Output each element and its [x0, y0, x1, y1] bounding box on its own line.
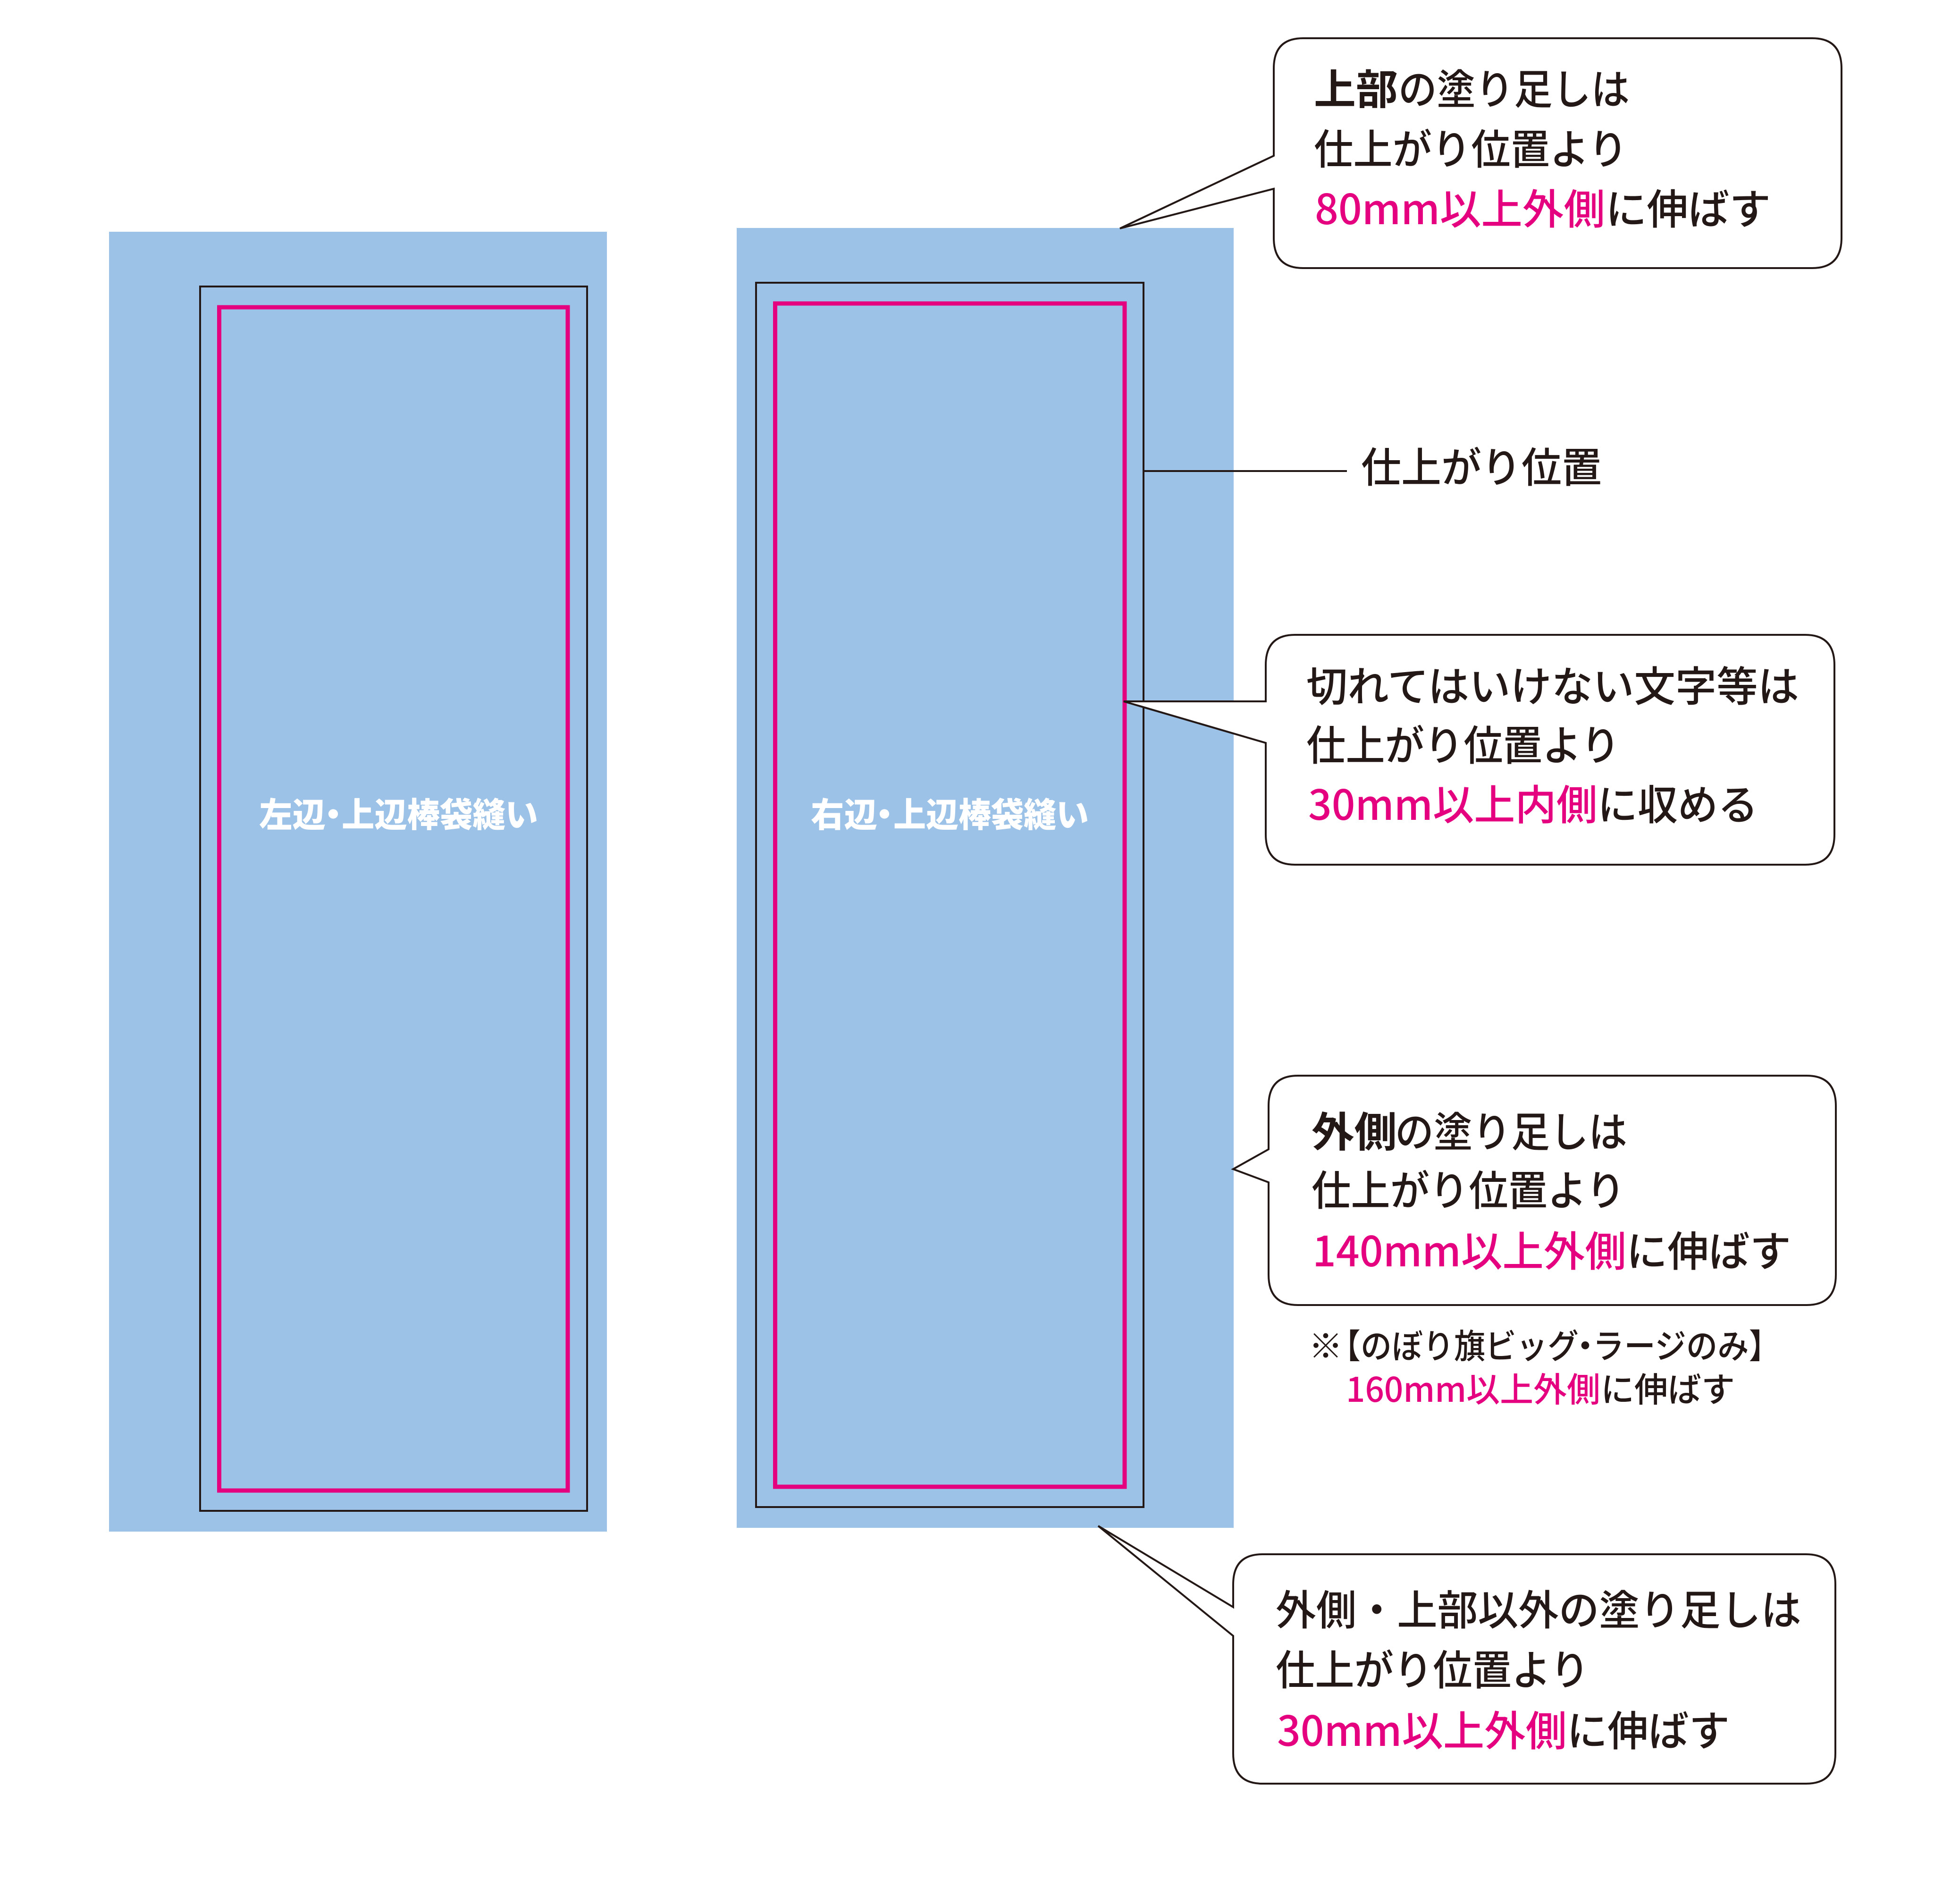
safe area: left diagram: [219, 307, 568, 1491]
callout: other bleed: [1098, 1526, 1835, 1784]
text: safe margin callout: 仕上がり位置より: [1306, 713, 1620, 773]
text: top callout: 仕上がり位置より: [1314, 117, 1628, 177]
note: big and large flags only: 160mm以上外側: [1346, 1362, 1600, 1412]
text: outer callout: [1312, 1099, 1791, 1279]
text: other callout: 外側・上部以外の塗り足しは: [1276, 1577, 1801, 1637]
trim line: left diagram: [200, 286, 587, 1511]
text: other callout: [1276, 1577, 1801, 1758]
note: big and large flags only: ラージのみ】: [1593, 1319, 1780, 1368]
text: other callout: に伸ばす: [1567, 1698, 1730, 1758]
label: right diagram: [811, 787, 1089, 837]
text: outer callout: に伸ばす: [1626, 1219, 1791, 1279]
text: safe margin callout: 切れてはいけない文字等は: [1306, 654, 1799, 714]
callout: outer bleed: [1233, 1076, 1836, 1305]
text: outer callout: 外側: [1312, 1099, 1397, 1159]
safe area: right diagram: [775, 303, 1125, 1487]
note: big and large flags only: [1309, 1319, 1780, 1412]
text: top callout: の塗り足しは: [1398, 57, 1630, 117]
speech bubble with tail: outer: [1233, 1076, 1836, 1305]
note: big and large flags only: ※: [1309, 1319, 1343, 1368]
bleed area: right diagram: [737, 228, 1234, 1528]
text: safe margin callout: [1306, 654, 1799, 832]
label: trim position: 仕上がり位置: [1361, 435, 1602, 495]
note: big and large flags only: ・: [1568, 1319, 1602, 1368]
leader line: trim position: [1144, 470, 1347, 472]
text: top callout: 80mm以上外側: [1315, 177, 1605, 236]
label: left diagram: ・: [316, 787, 350, 837]
panel: right-edge sewn flag diagram: [737, 228, 1234, 1528]
label: right diagram: ・: [867, 787, 901, 837]
bleed area: left diagram: [109, 232, 607, 1532]
text: other callout: 30mm以上外側: [1277, 1698, 1567, 1758]
note: big and large flags only: 【のぼり旗ビッグ: [1329, 1319, 1579, 1368]
text: safe margin callout: 30mm以上内側: [1308, 772, 1598, 832]
label: left diagram: 上辺棒袋縫い: [342, 787, 538, 837]
text: outer callout: 140mm以上外側: [1312, 1219, 1626, 1279]
text: outer callout: の塗り足しは: [1395, 1099, 1627, 1159]
panel: left-edge sewn flag diagram: [109, 232, 607, 1532]
text: safe margin callout: に収める: [1598, 772, 1758, 832]
text: other callout: 仕上がり位置より: [1276, 1637, 1589, 1697]
trim line: right diagram: [756, 283, 1144, 1507]
text: top callout: 上部: [1314, 57, 1398, 117]
label: left diagram: [259, 787, 538, 837]
speech bubble with tail: top: [1120, 38, 1842, 268]
text: top callout: [1314, 57, 1771, 236]
speech bubble with tail: other: [1098, 1526, 1835, 1784]
text: outer callout: 仕上がり位置より: [1312, 1158, 1625, 1218]
text: top callout: に伸ばす: [1606, 177, 1771, 236]
note: big and large flags only: に伸ばす: [1601, 1362, 1735, 1412]
callout: safe margin: [1124, 635, 1834, 865]
speech bubble with tail: safe margin: [1124, 635, 1834, 865]
label: right diagram: 右辺: [811, 787, 877, 837]
callout: top bleed: [1120, 38, 1842, 268]
label: right diagram: 上辺棒袋縫い: [893, 787, 1089, 837]
label: left diagram: 左辺: [259, 787, 326, 837]
